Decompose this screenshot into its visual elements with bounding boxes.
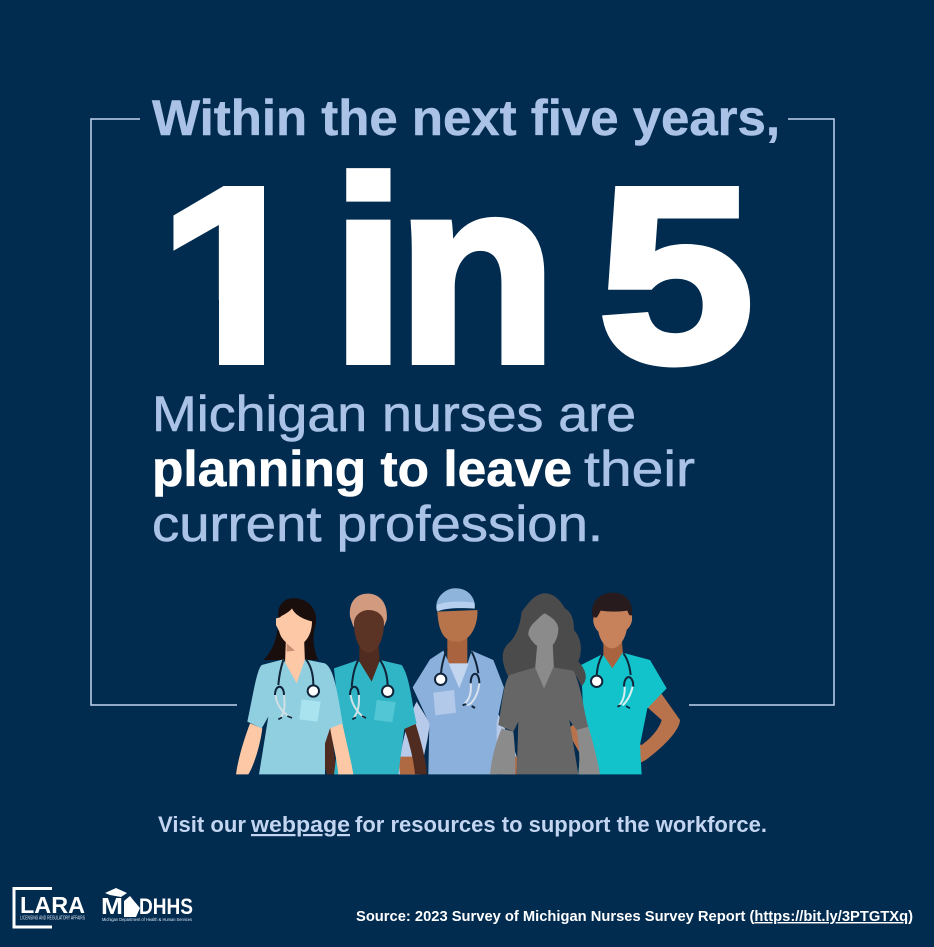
call to action: webpage: [250, 812, 350, 837]
call to action: [158, 812, 767, 837]
big statistic: 1 in 5: 5: [598, 136, 754, 414]
big statistic: 1 in 5: 1: [158, 136, 312, 414]
nurse 3: blue scrubs and surgical cap: [398, 588, 517, 774]
big statistic: 1 in 5: i: [331, 124, 406, 418]
text block: description: planning to leave: [152, 441, 572, 497]
heading: within the next five years: Within the next five years,: [152, 90, 780, 146]
nurse 4: grey silhouette: [490, 593, 600, 774]
logo: MDHHS: M: [101, 893, 123, 919]
frame: [91, 119, 834, 705]
big statistic: 1 in 5: n: [397, 124, 557, 418]
big statistic: 1 in 5: [173, 168, 750, 368]
call to action: for resources to support the workforce.: [355, 812, 767, 837]
logo: MDHHS: DHHS: [139, 894, 193, 919]
call to action: Visit our: [158, 812, 246, 837]
logo: LARA: LARA: [20, 892, 85, 918]
text block: description: [152, 386, 695, 552]
nurse 5: turquoise scrubs with hand on hip: [567, 593, 680, 774]
source citation: Source: 2023 Survey of Michigan Nurses Survey Report ( https://bit.ly/3PTGTXq): [356, 909, 913, 925]
logo: LARA: LICENSING AND REGULATORY AFFAIRS: [20, 916, 85, 922]
text block: description: Michigan nurses are: [152, 386, 636, 442]
logo: MDHHS: [101, 888, 193, 922]
nurse 1: light blue scrubs: [236, 598, 353, 774]
logo: MDHHS: Michigan Department of Health & Human Services: [102, 917, 193, 922]
text block: description: their: [584, 441, 695, 497]
illustration: five nurses: [236, 588, 680, 774]
nurse 2: teal scrubs: [318, 594, 427, 774]
text block: description: current profession.: [152, 496, 603, 552]
logo: LARA: [14, 888, 85, 927]
